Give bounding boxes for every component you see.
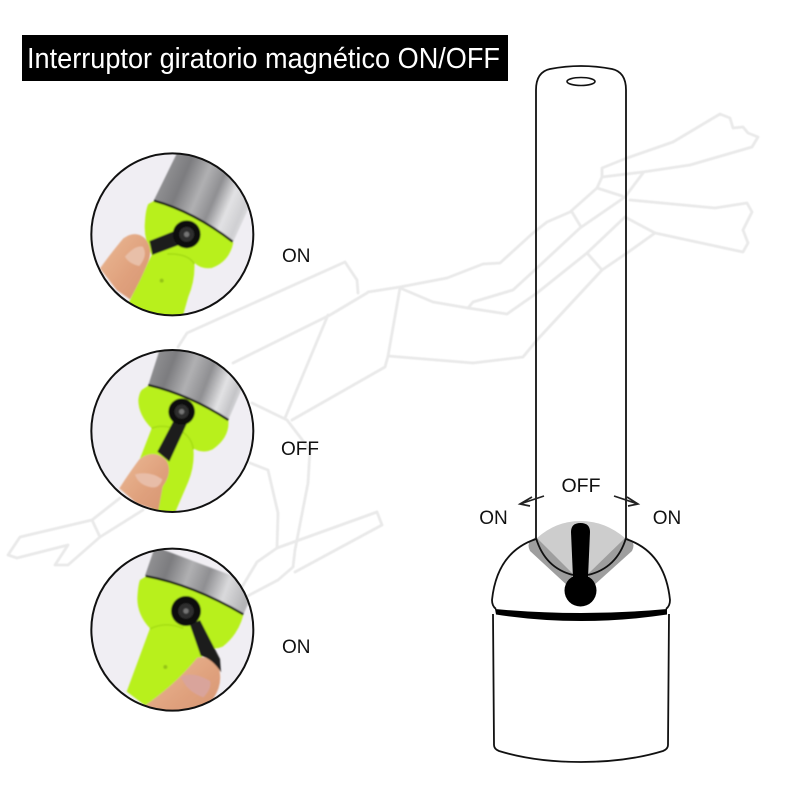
label: ON: ON [282, 637, 310, 658]
dome head [492, 539, 670, 609]
lower body [493, 614, 669, 762]
green head and handle [123, 201, 233, 320]
tube lower curve [536, 538, 626, 575]
knob [171, 596, 201, 626]
title banner [22, 35, 508, 81]
left ON shadow [528, 537, 573, 587]
lever [148, 231, 179, 256]
rim [148, 385, 228, 420]
handle crease [167, 254, 194, 264]
photo circle: switch OFF (centre) [91, 343, 253, 515]
finger [100, 234, 150, 299]
left arrow [520, 496, 544, 506]
black band [495, 609, 667, 621]
tube outline [536, 66, 626, 538]
photo circle: switch ON (right) [91, 547, 257, 718]
label: OFF: OFF [281, 439, 319, 460]
knob [173, 220, 201, 248]
handle crease [152, 426, 193, 449]
lever [157, 420, 187, 462]
finger [119, 454, 169, 511]
right ON shadow [588, 537, 634, 587]
handle crease [150, 625, 183, 629]
switch sweep fan [537, 521, 625, 575]
metal barrel [148, 351, 242, 420]
label: ON left: ON [479, 508, 508, 529]
finger [145, 657, 220, 718]
metal barrel [144, 550, 248, 614]
label: ON right: ON [653, 508, 681, 529]
watermark: diver silhouette outline [8, 114, 758, 600]
switch lever [571, 523, 590, 578]
switch knob [564, 574, 596, 606]
lever [190, 620, 221, 672]
flashlight line diagram [492, 66, 670, 762]
rim [146, 576, 243, 614]
label: OFF top: OFF [562, 475, 601, 497]
lanyard slot [567, 78, 595, 86]
right arrow [614, 496, 638, 506]
rim [154, 201, 233, 242]
metal barrel [154, 154, 248, 242]
label: ON: ON [282, 246, 310, 267]
knob [168, 398, 195, 425]
title banner: Interruptor giratorio magnético ON/OFF [27, 43, 500, 75]
green head and handle [127, 577, 243, 707]
green head and handle [135, 386, 228, 515]
photo circle: switch ON (left) [91, 148, 260, 320]
